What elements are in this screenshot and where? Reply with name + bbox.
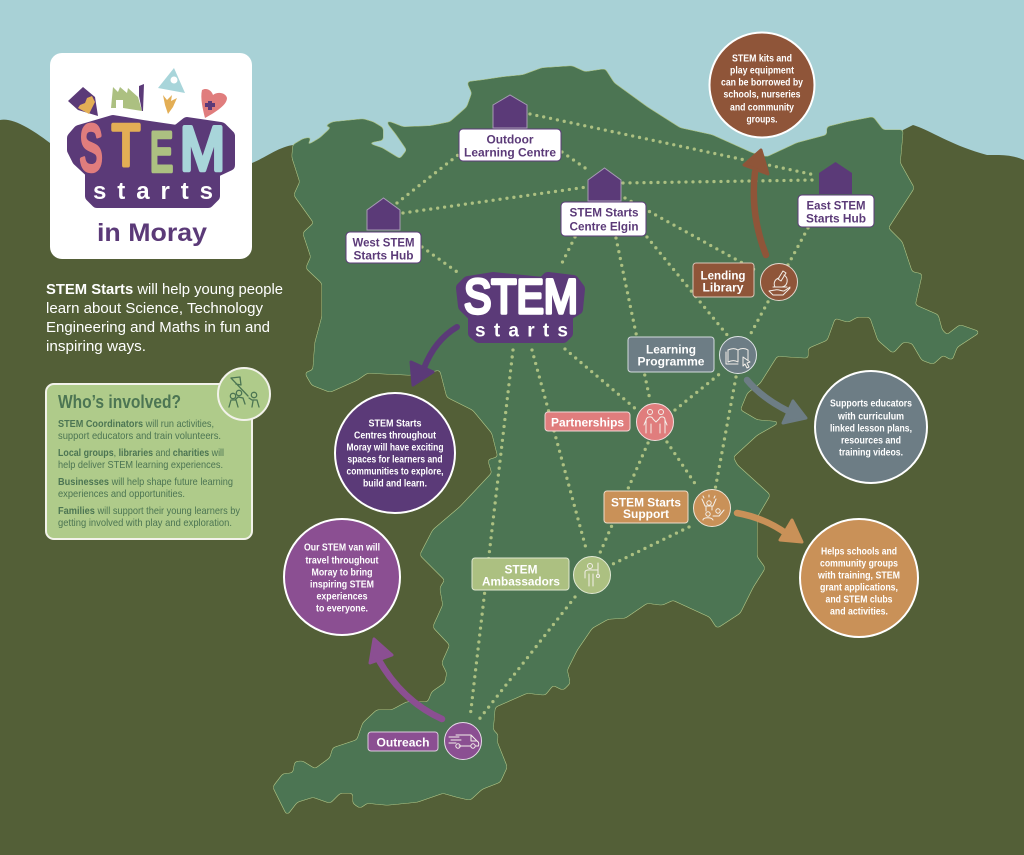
icon: factory: [111, 84, 144, 111]
label: Elgin centre: STEM Starts: [570, 206, 639, 220]
arrow: learning programme: [747, 380, 806, 423]
callout: lending library: STEM kits and: [732, 54, 792, 64]
text: families: [58, 505, 241, 529]
text: businesses: Businesses will help shape future learning: [58, 476, 233, 488]
label: lending library: Lending: [700, 268, 746, 282]
callout: learning programme: [815, 371, 927, 483]
label: Elgin centre: [561, 202, 646, 236]
callout: lending library: [710, 32, 814, 138]
label: learning programme: Programme: [638, 354, 705, 368]
intro text: inspiring ways.: [46, 339, 146, 355]
icon: people with flag: [218, 368, 270, 420]
callout: learning programme: with curriculum: [837, 412, 904, 422]
label: east hub: East STEM: [806, 198, 866, 212]
callout: STEM Starts centres: [335, 393, 455, 513]
logo letter T: T: [112, 114, 140, 178]
callout: support: grant applications,: [820, 582, 898, 594]
icon: rocket: [158, 68, 185, 114]
icon: two people shaking hands: [636, 404, 674, 440]
icon: cheering people: [694, 490, 730, 526]
callout: STEM van: travel throughout: [306, 556, 379, 566]
arrow: outreach: [370, 639, 442, 719]
text: families: getting involved with play and exploration.: [58, 517, 232, 529]
icon: presenter with pointer: [574, 556, 610, 594]
callout: learning programme: resources and: [841, 436, 901, 446]
central STEM Starts logo: [462, 271, 579, 342]
text: businesses: [58, 476, 233, 500]
arrow: support: [737, 513, 802, 542]
callout: support: with training, STEM: [817, 570, 900, 582]
text: local groups: [58, 447, 224, 471]
callout: STEM van: Moray to bring: [312, 568, 372, 578]
arrow: lending library: [744, 150, 768, 255]
label: outreach: [368, 732, 438, 751]
text: coordinators: [58, 418, 221, 442]
logo letter E: E: [150, 120, 173, 183]
callout: lending library: groups.: [746, 114, 778, 126]
icon: pencil: [68, 87, 98, 116]
text: local groups: Local groups, libraries and charities will: [58, 447, 224, 459]
callout: support: and activities.: [830, 606, 888, 618]
label: STEM Starts support: [604, 491, 688, 523]
house: west hub: [367, 198, 400, 230]
house: outdoor learning centre: [493, 95, 527, 128]
label: outdoor learning centre: [459, 129, 561, 161]
callout: STEM van: Our STEM van will: [304, 542, 380, 554]
label: outdoor learning centre: Outdoor: [486, 132, 534, 146]
house: east hub: [819, 162, 852, 194]
callout: STEM van: to everyone.: [316, 604, 368, 614]
heading: who's involved: Who’s involved?: [58, 391, 181, 412]
callout: learning programme: Supports educators: [830, 398, 912, 410]
label: partnerships: Partnerships: [551, 416, 624, 430]
icon: heart: [201, 89, 227, 118]
dotted connection network: [397, 114, 815, 722]
callout: STEM Starts centres: communities to explore,: [346, 466, 444, 478]
callout: support: community groups: [820, 558, 898, 570]
central STEM Starts logo: starts: [475, 320, 568, 342]
callout: support: and STEM clubs: [826, 594, 893, 606]
label: STEM ambassadors: Ambassadors: [482, 574, 560, 588]
label: STEM Starts support: STEM Starts: [611, 496, 681, 510]
intro text: learn about Science, Technology: [46, 301, 264, 317]
callout: lending library: can be borrowed by: [721, 78, 803, 88]
label: east hub: Starts Hub: [806, 212, 866, 226]
icon: microscope in hand: [760, 264, 798, 300]
callout: support: Helps schools and: [821, 546, 897, 558]
logo strapline: in Moray: [97, 219, 207, 247]
label: STEM Starts support: Support: [623, 507, 669, 521]
logo word starts: starts: [93, 178, 213, 205]
callout: lending library: schools, nurseries: [724, 90, 801, 100]
label: west hub: [346, 232, 421, 263]
text: local groups: help deliver STEM learning experiences.: [58, 459, 223, 471]
label: outreach: Outreach: [376, 736, 430, 750]
label: west hub: West STEM: [352, 236, 414, 250]
text: families: Families will support their young learners by: [58, 505, 241, 517]
central STEM Starts logo: STEM: [464, 271, 578, 324]
text: coordinators: support educators and train volunteers.: [58, 430, 221, 442]
logo card: [50, 53, 252, 259]
logo backing shape: [73, 121, 229, 202]
callout: support: [800, 519, 918, 637]
callout: learning programme: linked lesson plans,: [830, 424, 912, 434]
text: businesses: experiences and opportunities.: [58, 488, 185, 500]
callout: STEM van: [284, 519, 400, 635]
label: learning programme: [628, 337, 714, 372]
icon: van: [444, 722, 482, 760]
label: Elgin centre: Centre Elgin: [570, 220, 638, 234]
callout: lending library: play equipment: [730, 66, 795, 76]
arrow: logo to centres: [411, 327, 457, 385]
intro text: Engineering and Maths in fun and: [46, 320, 270, 336]
label: lending library: Library: [702, 280, 744, 294]
logo letter M: M: [180, 115, 225, 184]
map of Moray: [273, 66, 980, 815]
callout: STEM Starts centres: build and learn.: [363, 478, 427, 490]
label: east hub: [798, 195, 874, 227]
label: learning programme: Learning: [646, 342, 696, 356]
intro text: [46, 282, 283, 355]
callout: STEM Starts centres: STEM Starts: [368, 418, 422, 430]
logo letter S: S: [80, 112, 102, 184]
callout: STEM Starts centres: Centres throughout: [354, 430, 437, 442]
label: outdoor learning centre: Learning Centre: [464, 146, 556, 160]
intro text: STEM Starts will help young people: [46, 282, 283, 298]
callout: STEM van: experiences: [316, 592, 368, 602]
icon: book and cursor: [720, 336, 756, 374]
callout: STEM Starts centres: spaces for learners and: [348, 454, 442, 466]
label: lending library: [693, 263, 754, 297]
callout: lending library: and community: [730, 102, 794, 114]
label: STEM ambassadors: [472, 558, 569, 590]
label: west hub: Starts Hub: [354, 248, 414, 262]
label: STEM ambassadors: STEM: [504, 562, 538, 576]
panel: who's involved: [46, 384, 252, 539]
text: coordinators: STEM Coordinators will run activities,: [58, 418, 214, 430]
house: Elgin centre: [588, 168, 621, 201]
callout: STEM Starts centres: Moray will have exciting: [346, 442, 444, 454]
label: partnerships: [545, 412, 630, 431]
callout: learning programme: training videos.: [839, 448, 903, 458]
callout: STEM van: inspiring STEM: [310, 580, 374, 590]
